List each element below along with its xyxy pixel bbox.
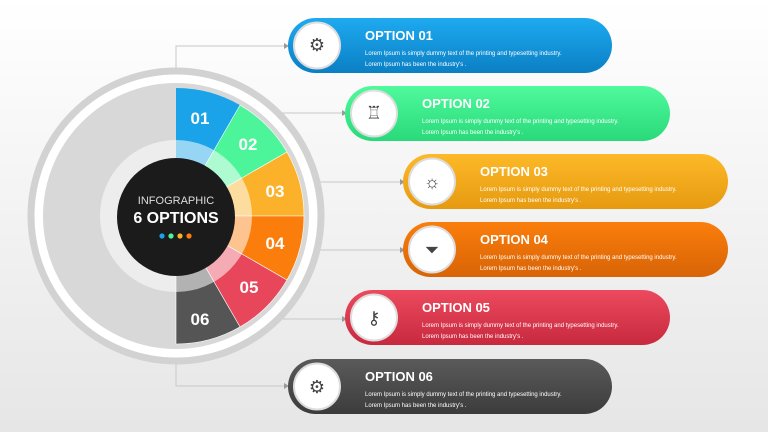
option 06: OPTION 06 [365, 369, 433, 384]
option 04: OPTION 04 [480, 232, 549, 247]
center hub [117, 158, 235, 276]
option 05: Lorem Ipsum is simply dummy text of the printing and typesetting industry. [422, 323, 619, 329]
segment 03 [176, 152, 304, 216]
segment 05: 05 [240, 278, 258, 297]
option 03: OPTION 03 [480, 164, 548, 179]
option 06 [288, 359, 612, 414]
connector lines [176, 46, 400, 386]
segment 02: 02 [239, 135, 257, 154]
segment 03: 03 [266, 182, 284, 201]
option 04 [403, 222, 728, 277]
option 01: Lorem Ipsum is simply dummy text of the printing and typesetting industry. [365, 51, 562, 57]
option 01 [288, 18, 612, 73]
option 06: ⚙ [309, 377, 325, 397]
option 02: OPTION 02 [422, 96, 490, 111]
circle chart [31, 71, 321, 361]
segment 06: 06 [191, 310, 209, 329]
option 02: ♖ [366, 103, 382, 123]
option 02: Lorem Ipsum is simply dummy text of the printing and typesetting industry. [422, 119, 619, 125]
option 04: Lorem Ipsum has been the industry's . [480, 266, 582, 272]
segment 04 [176, 216, 304, 280]
segment 06 [176, 216, 240, 344]
option 01: Lorem Ipsum has been the industry's . [365, 62, 467, 68]
center hub: 6 OPTIONS [133, 210, 219, 227]
option 01: OPTION 01 [365, 28, 433, 43]
option 05: OPTION 05 [422, 300, 490, 315]
option 02 [345, 86, 670, 141]
option 03: Lorem Ipsum is simply dummy text of the printing and typesetting industry. [480, 187, 677, 193]
segment 01: 01 [191, 109, 209, 128]
segment 04: 04 [266, 234, 285, 253]
option 01: ⚙ [309, 35, 325, 55]
center hub: INFOGRAPHIC [138, 195, 214, 207]
arrowheads [284, 43, 405, 389]
option 02: Lorem Ipsum has been the industry's . [422, 130, 524, 136]
option 05 [345, 290, 670, 345]
segment 02 [176, 105, 287, 216]
option 03: Lorem Ipsum has been the industry's . [480, 198, 582, 204]
option 05: Lorem Ipsum has been the industry's . [422, 334, 524, 340]
option 05: ⚷ [367, 308, 381, 328]
option 04: ⏷ [425, 240, 439, 260]
option 04: Lorem Ipsum is simply dummy text of the printing and typesetting industry. [480, 255, 677, 261]
segment 01 [176, 88, 240, 216]
segment 05 [176, 216, 287, 327]
option 03 [403, 154, 728, 209]
option 03: ☼ [424, 172, 440, 192]
option 06: Lorem Ipsum has been the industry's . [365, 403, 467, 409]
option 06: Lorem Ipsum is simply dummy text of the printing and typesetting industry. [365, 392, 562, 398]
